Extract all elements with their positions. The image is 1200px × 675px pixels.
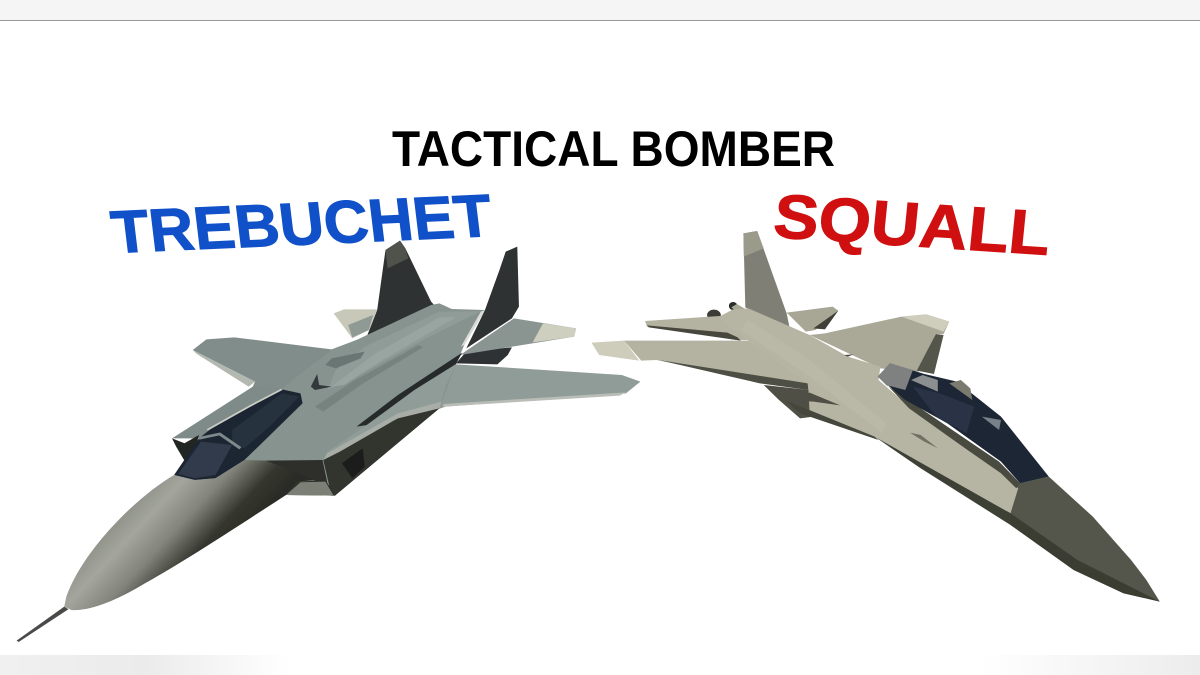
aircraft: Squall [591,231,1160,602]
nose [1007,477,1160,602]
canopy [174,389,303,480]
aircraft: Trebuchet [17,241,640,642]
fuselage upper hull [245,303,485,495]
fuselage [718,308,1018,513]
fuselage nose [64,460,315,610]
title: TACTICAL BOMBER [392,121,835,177]
canopy [882,380,1020,488]
label: Squall: SQUALL [771,182,1053,269]
label: Trebuchet: TREBUCHET [107,181,496,266]
top browser strip [0,0,1200,21]
pitot probe [17,607,68,642]
bottom shadow strip [0,655,1200,675]
